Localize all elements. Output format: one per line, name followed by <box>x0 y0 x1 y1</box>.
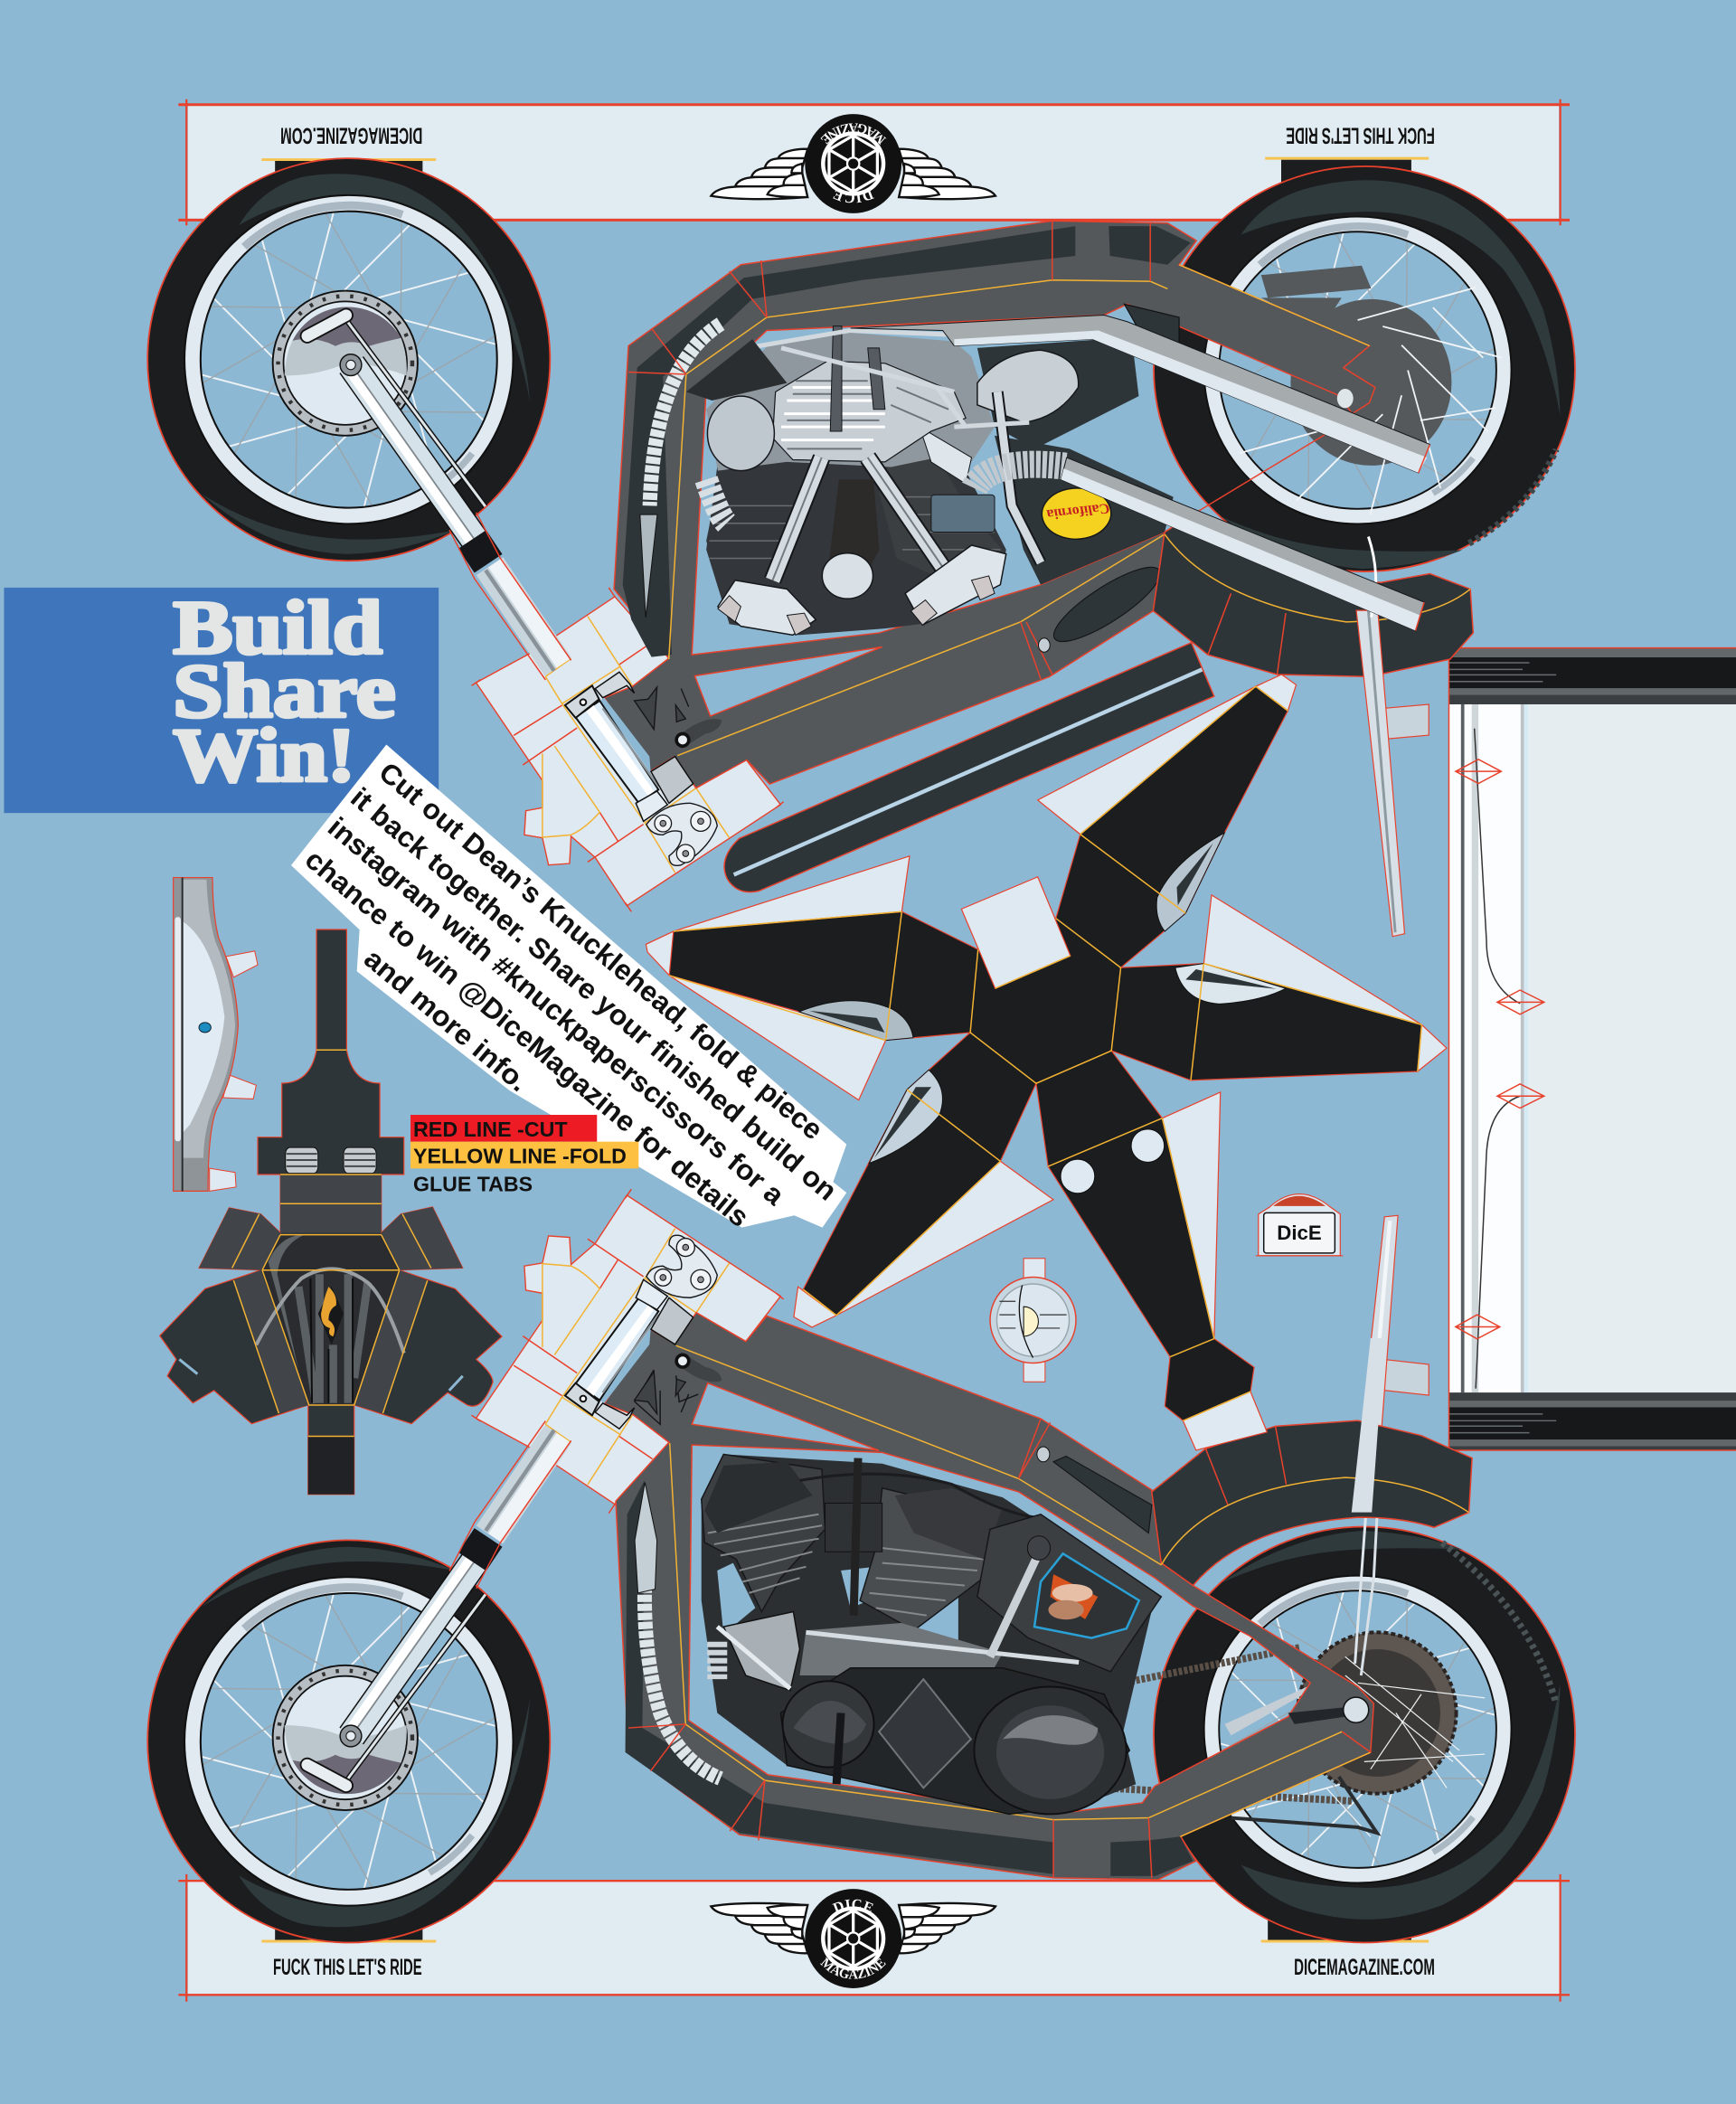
tab: right arm <box>1203 895 1447 1071</box>
pedal chrome <box>723 1612 799 1691</box>
engine dark case behind <box>977 339 1138 448</box>
kick lever <box>836 1712 841 1784</box>
bottom fender <box>1152 1338 1472 1675</box>
tab: upper arm <box>1038 675 1297 835</box>
tank badge label <box>1052 1584 1093 1602</box>
vertical rod <box>854 1458 858 1616</box>
air cleaner <box>822 553 873 599</box>
diamond cover <box>879 1679 971 1788</box>
pushrod outline <box>772 458 943 580</box>
top frame fold lines <box>669 265 1370 756</box>
callout paper <box>291 744 846 1228</box>
bottom frame dark band <box>626 1480 1193 1876</box>
rear section <box>308 1436 354 1495</box>
bolt threads <box>287 1154 375 1166</box>
upper strut with tab <box>1356 537 1429 937</box>
front wheel, top <box>147 158 550 561</box>
chain guard strip <box>724 643 1214 892</box>
motor mount <box>686 339 787 401</box>
left gear cover <box>707 396 774 471</box>
engine lower backing <box>706 458 1006 635</box>
top frame with knucklehead engine <box>604 221 1375 788</box>
top band text: website: DICEMAGAZINE.COM <box>280 123 422 148</box>
headlight piece <box>990 1259 1076 1382</box>
right cylinder head <box>905 545 1006 625</box>
star fold lines <box>669 686 1421 1420</box>
top exhaust pipes <box>851 316 1429 631</box>
black star body <box>669 686 1421 1420</box>
bottom frame hole <box>1037 1447 1050 1462</box>
tab: left arm <box>646 856 910 1100</box>
frame slot <box>1042 558 1173 651</box>
right side panel: tank sheet <box>1448 648 1736 1450</box>
tank outline <box>160 929 502 1495</box>
upper pipe highlight <box>954 330 1427 473</box>
Dice license plate piece <box>1256 1194 1343 1256</box>
bottom frame slot <box>1053 1457 1152 1533</box>
top paper band <box>178 99 1570 225</box>
upper pipe <box>851 316 1429 473</box>
shift rod <box>806 1632 1079 1663</box>
left cylinder <box>706 462 810 589</box>
rear cylinder <box>702 1454 826 1612</box>
tail hole <box>1337 389 1354 408</box>
callout text line 2: it back together. Share your finished build on <box>344 781 843 1207</box>
steering head lines <box>635 1370 698 1424</box>
seat slit left <box>179 1359 197 1374</box>
legend yellow swatch <box>410 1142 638 1168</box>
left cylinder head <box>718 580 816 635</box>
star wing lower left slot <box>874 1087 931 1158</box>
fender tabs <box>210 951 258 1191</box>
transmission plate <box>995 436 1174 585</box>
right gear cover <box>977 350 1079 422</box>
headline line 3: Win! <box>173 714 355 798</box>
fender body <box>174 878 238 1191</box>
transmission body <box>780 1668 1129 1814</box>
fender shine <box>183 921 224 1133</box>
top winged logo <box>711 114 995 213</box>
star wing upper slot <box>1177 843 1213 905</box>
engine upper backing <box>706 333 995 471</box>
rear coil spring <box>707 1642 727 1679</box>
bottom frame body <box>604 1313 1373 1880</box>
top hub and lower fork <box>273 291 571 680</box>
top band text: slogan: FUCK THIS LET'S RIDE <box>1286 123 1435 148</box>
engine backing <box>702 1454 1155 1807</box>
clutch cover <box>783 1681 874 1768</box>
rocker arm dark detail <box>830 326 885 431</box>
instruction callout <box>291 744 846 1233</box>
tank grey highlight <box>269 1235 305 1370</box>
center manifold <box>826 1503 882 1552</box>
swing arm slot <box>1124 304 1179 350</box>
bottom frame cut lines <box>628 1419 1371 1878</box>
rear axle plate <box>1288 1707 1345 1724</box>
engine top case <box>772 361 966 462</box>
bottom fork crown and tree <box>565 1235 722 1429</box>
primary cover <box>974 1686 1127 1814</box>
tank top dome <box>262 1235 400 1405</box>
bottom band text: slogan: FUCK THIS LET'S RIDE <box>273 1955 422 1980</box>
tab: bottom end <box>1183 1392 1267 1450</box>
bottom winged logo <box>711 1889 995 1988</box>
tank lighter bands <box>199 1175 463 1413</box>
seahorse badge <box>318 1287 344 1344</box>
chrome rod <box>990 1555 1038 1656</box>
rocker top right <box>895 1488 1003 1560</box>
fin stripes <box>781 387 885 440</box>
bottom frame with v-twin engine <box>604 1313 1373 1880</box>
bottom arm circle left <box>1061 1159 1095 1194</box>
right cylinder <box>873 458 1006 585</box>
legend red swatch <box>410 1115 597 1142</box>
tank ribs <box>298 1274 368 1403</box>
pushrod chrome <box>772 458 943 580</box>
star wing upper <box>1156 833 1224 931</box>
tank badge <box>1051 1574 1098 1619</box>
bottom frame lower strip <box>635 1483 657 1593</box>
bolts left <box>286 1147 318 1174</box>
front cylinder <box>860 1488 993 1630</box>
blue taillight <box>199 1023 211 1033</box>
primary inner <box>996 1705 1104 1799</box>
clutch cover center <box>793 1701 866 1744</box>
rear fender side piece <box>174 878 258 1191</box>
tank and seat template <box>160 929 502 1495</box>
star wing left <box>799 1001 913 1041</box>
top pipe cable <box>799 1474 1041 1518</box>
primary highlight <box>1003 1715 1098 1745</box>
lower pipe highlight <box>1061 468 1420 631</box>
light head boss <box>920 427 972 484</box>
rear wheel, top <box>1154 158 1575 571</box>
kicker bar <box>997 392 1041 562</box>
callout text line 4: chance to win @DiceMagazine for details <box>299 844 755 1233</box>
tab: bottom arm <box>1162 1092 1221 1339</box>
kicker bar chrome <box>997 392 1041 562</box>
cylinder fins <box>708 1514 984 1616</box>
tank fold lines <box>232 1050 431 1436</box>
front coil spring <box>706 479 726 524</box>
star wing right slot <box>1185 969 1277 989</box>
seat slit right <box>449 1376 463 1391</box>
top fender <box>1153 513 1473 676</box>
tank lower badge <box>1048 1600 1084 1619</box>
fender mid tone <box>183 880 235 1158</box>
lower pipe <box>1061 458 1424 631</box>
front wheel, bottom <box>147 1540 550 1943</box>
star wing left slot <box>809 1011 884 1033</box>
bottom hub and lower fork <box>273 1421 571 1810</box>
top linkage <box>747 330 1029 427</box>
star wing right <box>1175 964 1286 1004</box>
tank blue outline <box>1034 1553 1139 1638</box>
headline line 2: Share <box>173 649 396 733</box>
California sticker <box>1034 482 1118 545</box>
top frame body <box>604 221 1375 788</box>
bottom frame chain strip <box>645 1541 721 1778</box>
white square tab <box>961 877 1071 988</box>
frame hole <box>1038 638 1050 652</box>
callout text line 3: instagram with #knuckpaperscissors for a <box>322 811 791 1212</box>
Dice license plate piece: DicE <box>1277 1222 1322 1244</box>
head bolts <box>718 576 995 635</box>
top fork crown and tree <box>565 672 722 865</box>
sticker lettering: California <box>1045 500 1111 522</box>
legend yellow label: YELLOW LINE -FOLD <box>413 1144 627 1167</box>
oil tank box <box>977 1514 1161 1672</box>
legend glue label: GLUE TABS <box>413 1173 533 1196</box>
callout text line 5: and more info. <box>358 942 534 1098</box>
pedal rod <box>717 1627 790 1689</box>
tank black rib lines <box>310 1278 353 1403</box>
star shaped tank template <box>646 675 1447 1450</box>
lower engine mid block <box>799 1623 1003 1675</box>
bottom paper band <box>178 1874 1570 2002</box>
callout text line 1: Cut out Dean’s Knucklehead, fold & piece <box>373 756 829 1146</box>
fender strut <box>1352 1338 1384 1513</box>
bottom tab sheet <box>472 1189 784 1514</box>
pipe cut ends <box>1416 445 1429 631</box>
headline box <box>4 587 439 813</box>
legend <box>410 1115 638 1196</box>
seahorse emblem <box>321 1287 336 1336</box>
top frame cut lines <box>628 221 1150 679</box>
shifter knob <box>1027 1536 1051 1560</box>
fender line <box>182 878 184 1191</box>
rear wheel, bottom <box>1154 1527 1575 1943</box>
cylinder fins <box>709 497 1000 559</box>
top frame dark band <box>623 226 1191 657</box>
bolts right <box>344 1147 376 1174</box>
carburetor body <box>827 479 879 593</box>
axle wire <box>1361 1518 1377 1675</box>
fender inner strip <box>175 917 181 1141</box>
bottom sprocket and chain <box>1104 1632 1485 1836</box>
top tab sheet <box>472 588 784 911</box>
top frame chain strip <box>650 324 721 505</box>
rear axle <box>1344 1697 1369 1722</box>
pushrod shade <box>772 458 943 580</box>
flex pipe <box>975 465 1067 488</box>
top frame lower strip <box>640 514 657 618</box>
lower strut with tab <box>1353 1215 1429 1664</box>
headline line 1: Build <box>173 587 382 671</box>
blue engine gaps <box>717 1563 958 1642</box>
bottom frame fold lines <box>670 1345 1371 1836</box>
footpeg rubber <box>931 495 995 532</box>
bottom band text: website: DICEMAGAZINE.COM <box>1294 1955 1435 1980</box>
bottom arm circle right <box>1131 1129 1165 1162</box>
rocker top <box>704 1462 813 1533</box>
tank arc <box>256 1269 404 1354</box>
legend red label: RED LINE -CUT <box>413 1118 568 1141</box>
star wing lower left <box>869 1070 942 1164</box>
tab: lower left arm <box>794 1161 1053 1327</box>
